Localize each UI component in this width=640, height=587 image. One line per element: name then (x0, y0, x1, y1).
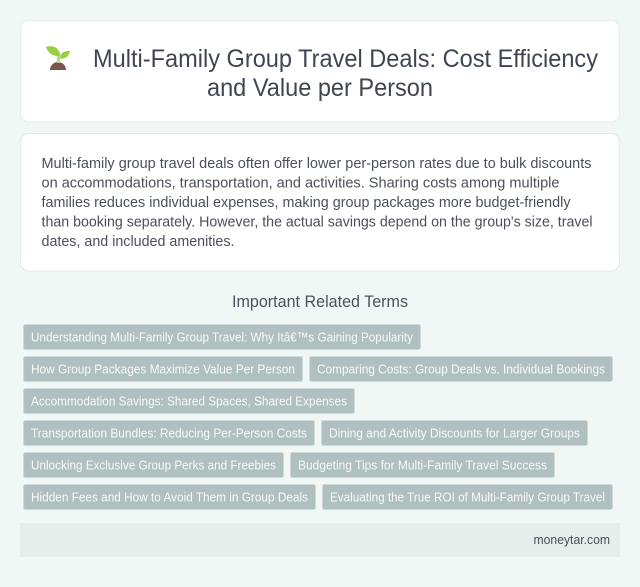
tag: Understanding Multi-Family Group Travel: Why Itâ€™s Gaining Popularity (31, 330, 413, 344)
tag (310, 356, 612, 382)
tag (24, 484, 316, 510)
tag (322, 484, 612, 510)
icon: seedling (46, 46, 70, 70)
tag: Budgeting Tips for Multi-Family Travel Success (298, 458, 547, 472)
tag: Evaluating the True ROI of Multi-Family Group Travel (330, 490, 605, 504)
heading: important related terms: Important Related Terms (232, 293, 408, 311)
tag: Unlocking Exclusive Group Perks and Freebies (31, 458, 276, 472)
tag: How Group Packages Maximize Value Per Person (31, 362, 295, 376)
text block: description: families reduces individual expenses, making group packages more budget-friendly (42, 194, 571, 211)
tag (290, 452, 554, 478)
tag (322, 420, 588, 446)
title (93, 45, 598, 102)
panel: description (20, 134, 620, 271)
tag: Transportation Bundles: Reducing Per-Person Costs (31, 426, 307, 440)
tag: Comparing Costs: Group Deals vs. Individual Bookings (317, 362, 605, 376)
tag: Dining and Activity Discounts for Larger Groups (329, 426, 580, 440)
tag (24, 420, 314, 446)
title: Multi-Family Group Travel Deals: Cost Efficiency (93, 45, 598, 73)
tag (24, 356, 302, 382)
tag (24, 388, 354, 414)
text block: description: Multi-family group travel deals often offer lower per-person rates due to bulk discounts (42, 155, 592, 172)
text block: description: on accommodations, transportation, and activities. Sharing costs among multiple (42, 174, 560, 192)
footer source text: moneytar.com (534, 532, 610, 547)
tag: Hidden Fees and How to Avoid Them in Group Deals (31, 490, 308, 504)
panel: title card (20, 20, 620, 122)
text block: description: than booking separately. However, the actual savings depend on the group's size, travel (42, 214, 592, 230)
text block: description (42, 155, 592, 250)
tag (24, 324, 420, 350)
tag (24, 452, 284, 478)
title: and Value per Person (207, 74, 433, 102)
text block: description: dates, and included amenities. (42, 233, 234, 250)
footer (20, 523, 620, 557)
tag: Accommodation Savings: Shared Spaces, Shared Expenses (31, 394, 347, 408)
tag list (24, 324, 612, 510)
